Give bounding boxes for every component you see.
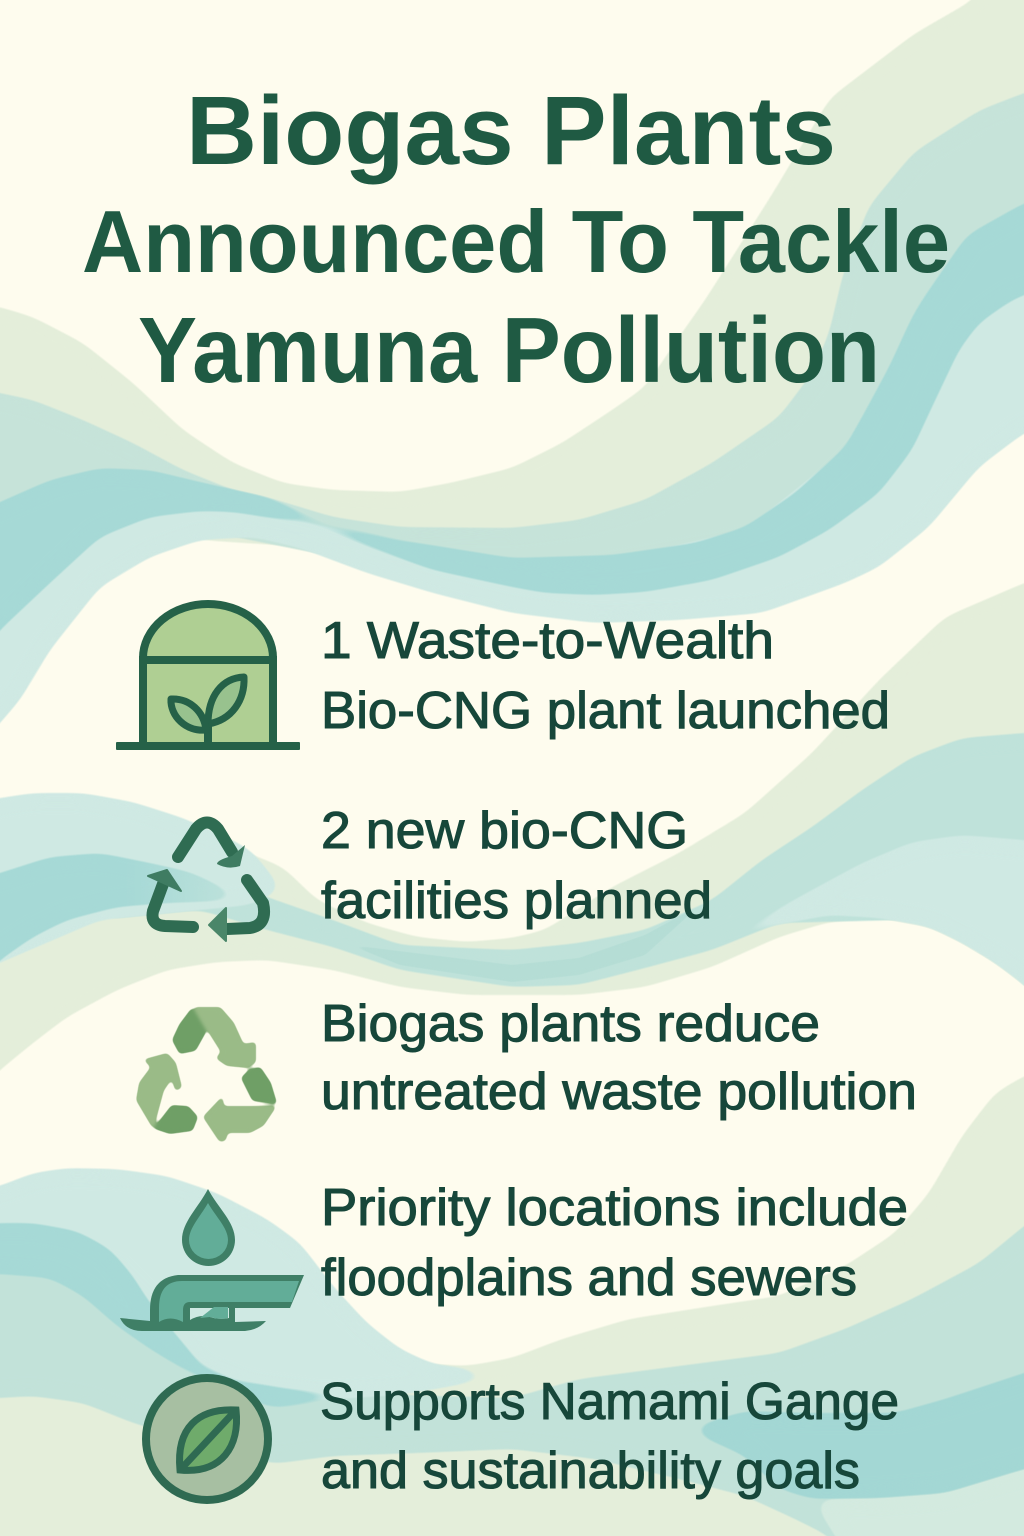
text: item 1: Bio-CNG plant launched — [321, 682, 890, 740]
text: item 5 — [320, 1373, 899, 1500]
text: item 1: 1 Waste-to-Wealth — [321, 612, 774, 670]
text: item 4: Priority locations include — [321, 1179, 908, 1237]
text: item 5: Supports Namami Gange — [320, 1373, 899, 1431]
text: item 1 — [321, 612, 890, 740]
item 4: priority locations — [120, 1179, 908, 1331]
title: Announced To Tackle — [82, 192, 950, 291]
text: item 3: untreated waste pollution — [321, 1063, 917, 1121]
item 1: Waste-to-Wealth plant — [116, 604, 890, 750]
text: item 3 — [321, 995, 917, 1121]
title: Yamuna Pollution — [138, 298, 880, 402]
icon: green recycle symbol — [137, 1008, 276, 1141]
item 2: new bio-CNG facilities — [148, 802, 712, 941]
text: item 2: 2 new bio-CNG — [321, 802, 688, 860]
text: item 2 — [321, 802, 712, 930]
text: item 3: Biogas plants reduce — [321, 995, 820, 1053]
icon: leaf in circle — [146, 1378, 268, 1500]
item 3: reduce untreated waste — [137, 995, 917, 1141]
icon: dark recycle arrows — [148, 822, 264, 941]
icon: water drop over sewer pipe — [120, 1189, 304, 1331]
icon: biogas dome with sprout — [116, 604, 300, 750]
text: item 2: facilities planned — [321, 872, 712, 930]
text: item 4 — [321, 1179, 908, 1307]
title: Biogas Plants — [186, 76, 836, 185]
text: item 4: floodplains and sewers — [321, 1249, 857, 1307]
title — [82, 76, 950, 402]
item 5: Namami Gange goals — [146, 1373, 899, 1500]
text: item 5: and sustainability goals — [321, 1442, 860, 1500]
